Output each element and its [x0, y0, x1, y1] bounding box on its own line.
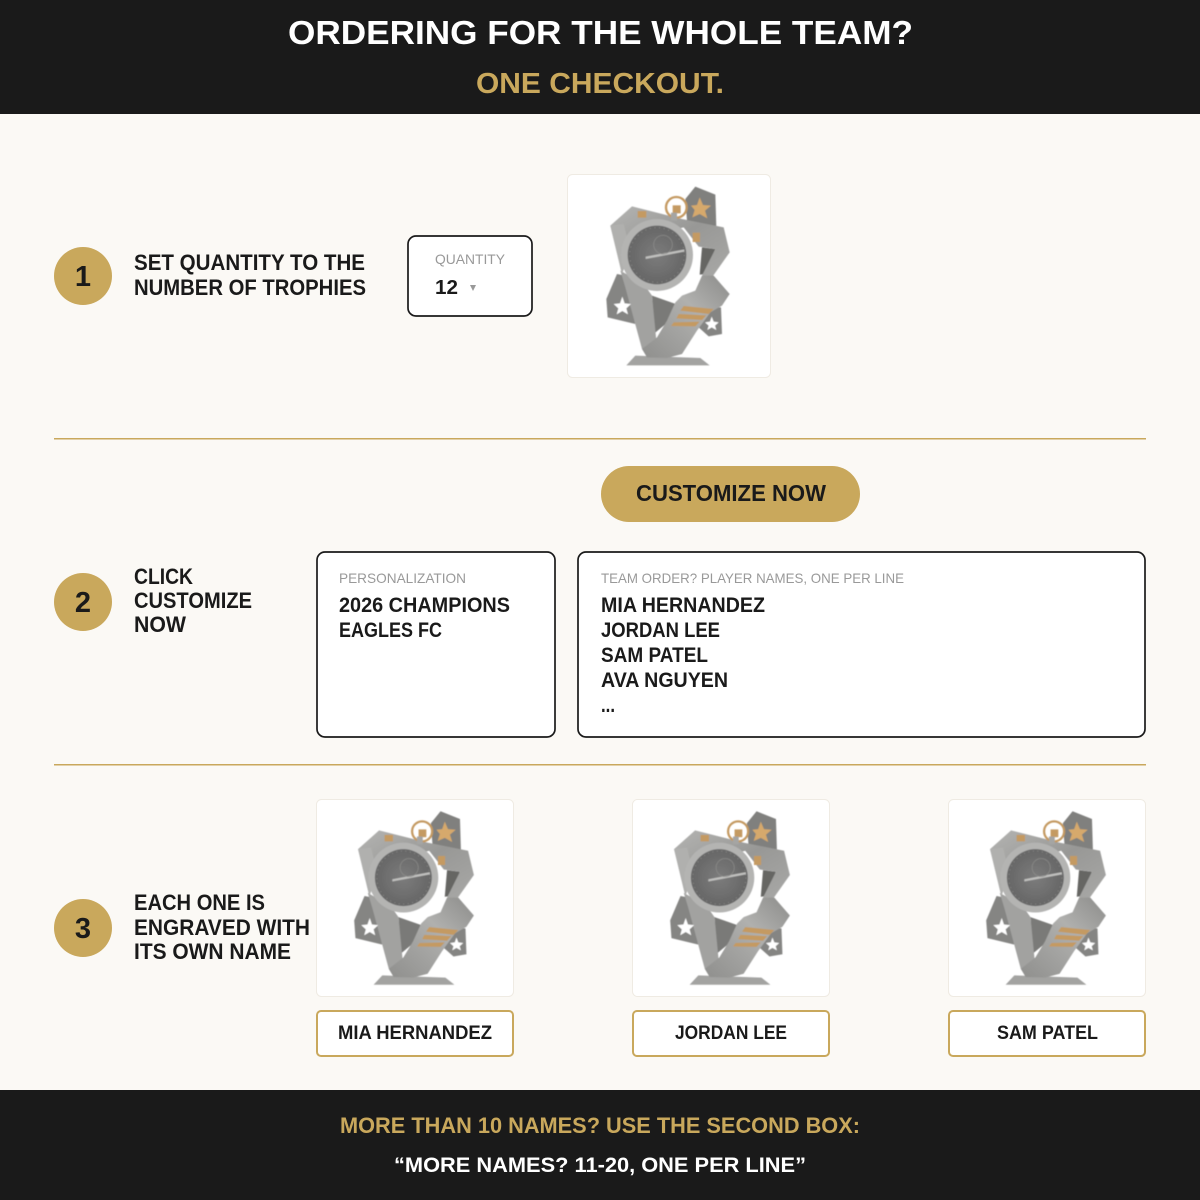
- engraved trophy: Mia Hernandez: [316, 800, 514, 1056]
- personalization box: 2026 CHAMPIONS: [339, 594, 510, 617]
- divider: [54, 764, 1146, 766]
- team names box: JORDAN LEE: [601, 619, 720, 642]
- step 1 number badge: 1: [75, 261, 91, 293]
- step 2 number badge: 2: [75, 587, 91, 619]
- engraved trophy: Sam Patel: SAM PATEL: [997, 1023, 1098, 1044]
- step 2 instruction: CUSTOMIZE: [134, 588, 252, 613]
- footer tip: MORE THAN 10 NAMES? USE THE SECOND BOX:: [340, 1113, 860, 1138]
- subtitle: ONE CHECKOUT.: [476, 68, 724, 100]
- trophy image card: [568, 174, 770, 378]
- step 1 instruction: NUMBER OF TROPHIES: [134, 275, 366, 300]
- team names box: MIA HERNANDEZ: [601, 594, 765, 617]
- team names box: AVA NGUYEN: [601, 669, 728, 692]
- engraved trophy: Jordan Lee: JORDAN LEE: [675, 1023, 787, 1044]
- team names box: [578, 552, 1145, 737]
- engraved trophy: Mia Hernandez: MIA HERNANDEZ: [338, 1023, 492, 1044]
- divider: [54, 438, 1146, 440]
- step 2 instruction: CLICK: [134, 564, 193, 589]
- step 3 number badge: [54, 899, 112, 957]
- personalization box: PERSONALIZATION: [339, 570, 466, 586]
- quantity selector: 12: [435, 277, 458, 299]
- customize now button: CUSTOMIZE NOW: [636, 480, 826, 506]
- step 2: [54, 552, 1145, 737]
- footer banner: [0, 1090, 1200, 1200]
- engraved trophy: Jordan Lee: [632, 800, 830, 1056]
- step 1 number badge: [54, 247, 112, 305]
- step 3: [54, 800, 1146, 1056]
- step 3 number badge: 3: [75, 913, 91, 945]
- team names box: ...: [601, 694, 615, 717]
- personalization box: EAGLES FC: [339, 619, 442, 642]
- customize now button: [601, 466, 860, 522]
- step 2 instruction: NOW: [134, 612, 186, 637]
- team names box: SAM PATEL: [601, 644, 708, 667]
- step 2 instruction: [134, 564, 252, 637]
- step 3 instruction: ENGRAVED WITH: [134, 915, 310, 940]
- engraved trophy: Sam Patel: [948, 800, 1146, 1056]
- quantity selector: QUANTITY: [435, 251, 506, 267]
- footer quote: “MORE NAMES? 11-20, ONE PER LINE”: [394, 1154, 806, 1177]
- step 1 instruction: [134, 250, 366, 300]
- title: ORDERING FOR THE WHOLE TEAM?: [288, 14, 913, 51]
- quantity selector: [408, 236, 532, 316]
- step 1: [54, 174, 770, 378]
- step 3 instruction: ITS OWN NAME: [134, 939, 291, 964]
- header banner: [0, 0, 1200, 114]
- step 3 instruction: EACH ONE IS: [134, 890, 265, 915]
- team names box: TEAM ORDER? PLAYER NAMES, ONE PER LINE: [601, 570, 904, 586]
- personalization box: [317, 552, 555, 737]
- step 2 number badge: [54, 573, 112, 631]
- step 1 instruction: SET QUANTITY TO THE: [134, 250, 365, 275]
- step 3 instruction: [134, 890, 310, 964]
